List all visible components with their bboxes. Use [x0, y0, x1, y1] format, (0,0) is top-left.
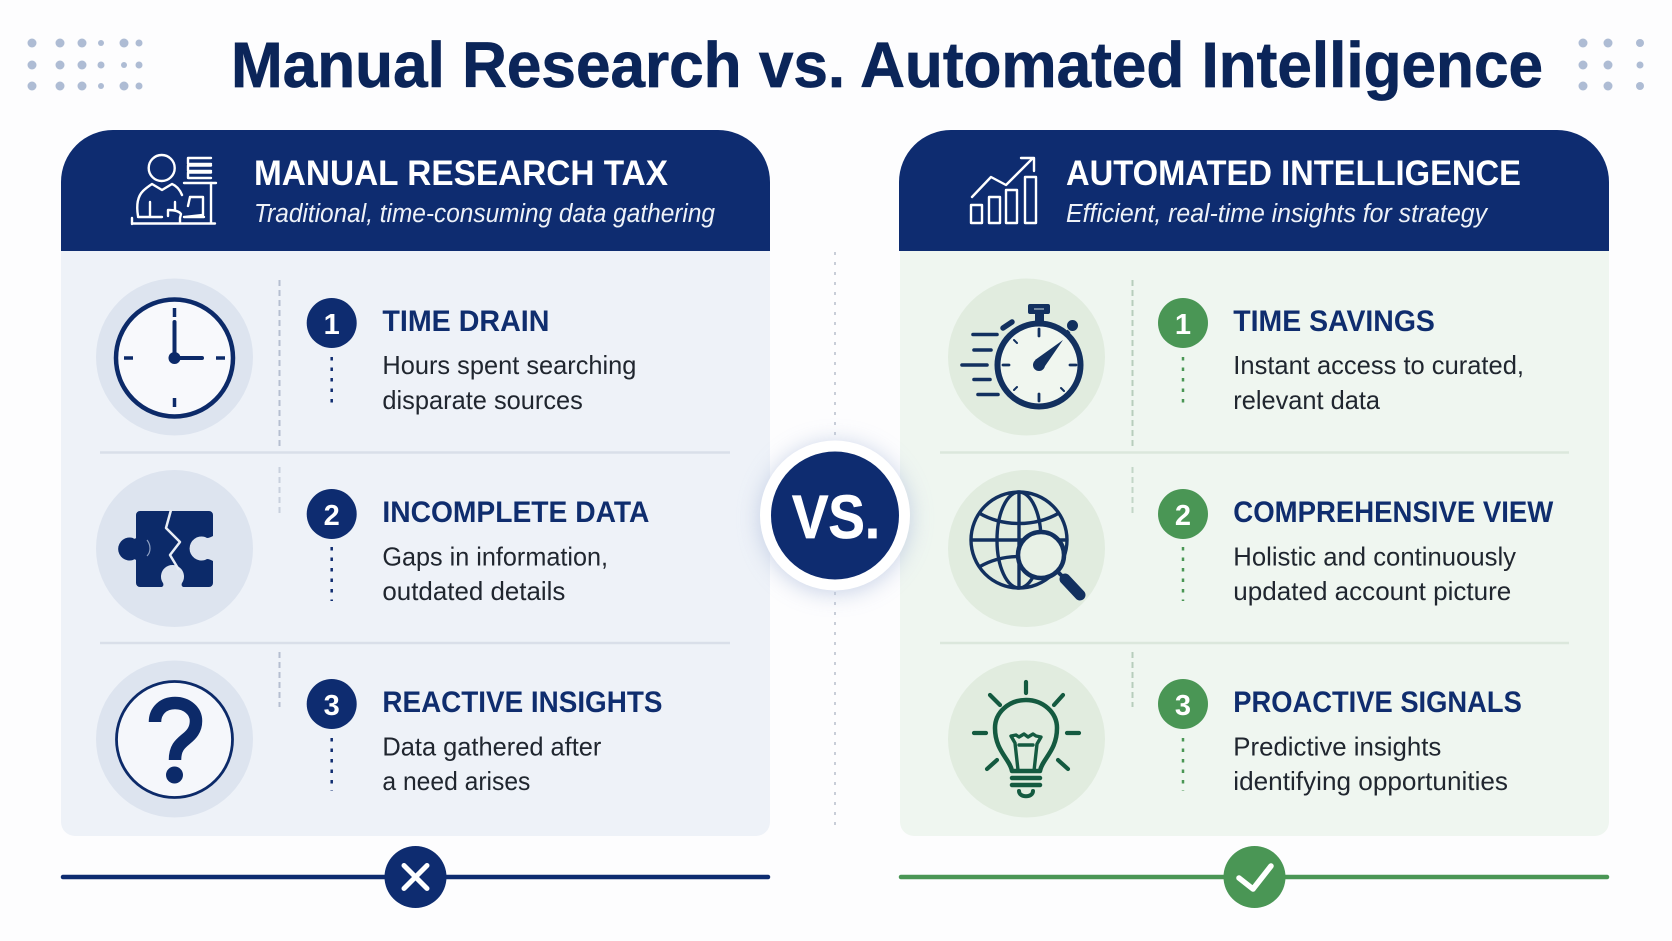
header subtitle: manual: Traditional, time-consuming data gathering	[254, 200, 715, 228]
icon: clock	[96, 278, 253, 436]
text: incomplete data	[382, 542, 608, 606]
badge 3: 3	[324, 690, 340, 722]
text: comprehensive view: Holistic and continuously	[1233, 542, 1516, 572]
header subtitle: automated: Efficient, real-time insights for strategy	[1066, 200, 1489, 228]
text: proactive signals: identifying opportunities	[1233, 766, 1508, 796]
heading: comprehensive view: COMPREHENSIVE VIEW	[1233, 496, 1553, 529]
title: Manual Research vs. Automated Intelligence	[231, 29, 1543, 101]
badge 1: 1	[324, 309, 340, 341]
icon: researcher at desk	[132, 155, 216, 224]
text: reactive insights	[382, 732, 602, 796]
badge 1	[1158, 298, 1208, 348]
header title: automated: AUTOMATED INTELLIGENCE	[1066, 154, 1521, 193]
text: proactive signals: Predictive insights	[1233, 732, 1441, 762]
row 2: comprehensive view	[948, 467, 1553, 627]
icon: rising bar chart	[971, 158, 1036, 223]
badge 2: 2	[1175, 500, 1191, 532]
decorative dots right	[1578, 38, 1644, 90]
heading: time savings: TIME SAVINGS	[1233, 305, 1435, 338]
panel header: automated	[899, 130, 1609, 251]
row 3: reactive insights	[96, 652, 662, 818]
text: time drain: disparate sources	[382, 385, 583, 415]
badge 3	[1158, 679, 1208, 729]
panel: manual research tax	[61, 130, 770, 836]
text: time drain	[382, 350, 636, 415]
icon: question mark	[96, 660, 253, 818]
icon: globe with magnifier	[948, 470, 1105, 627]
icon: puzzle piece	[96, 470, 253, 627]
badge 3	[307, 679, 357, 729]
badge 2: 2	[324, 500, 340, 532]
icon: stopwatch	[948, 278, 1105, 436]
badge 2	[307, 489, 357, 539]
negative indicator	[63, 846, 768, 908]
row 1: time savings	[948, 278, 1524, 447]
text: incomplete data: outdated details	[382, 576, 565, 606]
panel header: manual	[61, 130, 770, 251]
decorative dots left	[28, 38, 142, 90]
panel: automated intelligence	[899, 130, 1609, 836]
text: incomplete data: Gaps in information,	[382, 542, 608, 572]
row 2: incomplete data	[96, 467, 649, 627]
badge 1: 1	[1175, 309, 1191, 341]
text: reactive insights: a need arises	[382, 766, 530, 796]
text: proactive signals	[1233, 732, 1508, 796]
row 3: proactive signals	[948, 652, 1522, 818]
center divider	[834, 252, 836, 832]
VS badge: VS.	[792, 483, 880, 551]
row 1: time drain	[96, 278, 636, 447]
icon: light bulb	[948, 660, 1105, 818]
text: comprehensive view	[1233, 542, 1516, 606]
text: time savings	[1233, 350, 1524, 415]
heading: reactive insights: REACTIVE INSIGHTS	[382, 686, 662, 719]
badge 2	[1158, 489, 1208, 539]
heading: time drain: TIME DRAIN	[382, 305, 549, 338]
heading: proactive signals: PROACTIVE SIGNALS	[1233, 686, 1522, 719]
text: time savings: Instant access to curated,	[1233, 350, 1524, 380]
badge 3: 3	[1175, 690, 1191, 722]
VS badge	[759, 440, 911, 594]
text: time savings: relevant data	[1233, 385, 1381, 415]
text: comprehensive view: updated account picture	[1233, 576, 1511, 606]
heading: incomplete data: INCOMPLETE DATA	[382, 496, 649, 529]
text: time drain: Hours spent searching	[382, 350, 636, 380]
header title: manual: MANUAL RESEARCH TAX	[254, 154, 669, 193]
badge 1	[307, 298, 357, 348]
positive indicator	[901, 846, 1607, 908]
text: reactive insights: Data gathered after	[382, 732, 602, 762]
